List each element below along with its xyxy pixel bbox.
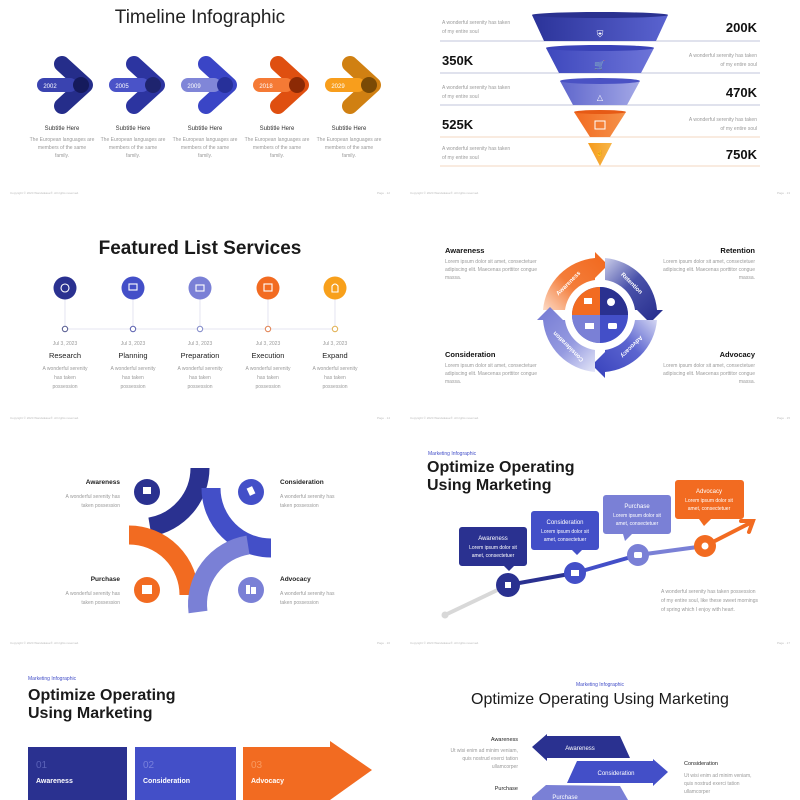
trend line [442,521,753,618]
funnel labels: of my entire soul [720,62,757,68]
text blocks: Awareness [491,737,518,743]
items text: possession [120,384,146,390]
callout boxes: Purchase [624,504,650,510]
text blocks: Lorem ipsum dolor sit amet, consectetuer [445,259,537,265]
items text: Jul 3, 2023 [121,341,145,347]
callout boxes: amet, consectetuer [688,506,731,512]
items text: A wonderful serenity [42,366,88,372]
arrow: 2009: 2009 [187,84,201,90]
items text: possession [255,384,281,390]
items text: possession [52,384,78,390]
heading: Using Marketing [427,477,551,494]
text blocks: Ut wisi enim ad minim veniam, [450,748,518,754]
items text: A wonderful serenity [245,366,291,372]
arrow: awareness [532,734,630,761]
descriptions: members of the same [38,145,86,151]
heading [427,451,575,494]
step 03 arrow: Advocacy [251,778,284,785]
text blocks: Lorem ipsum dolor sit amet, consectetuer [445,363,537,369]
subtitles: Subtitle Here [116,126,151,132]
arrow: 2029 [325,64,377,106]
subtitles [45,126,367,132]
items text: A wonderful serenity [177,366,223,372]
items text: A wonderful serenity [110,366,156,372]
step 01: Awareness [36,778,73,785]
divider lines [440,41,760,166]
text blocks: taken possession [81,600,120,606]
step 03 arrow: 03 [251,760,263,771]
text blocks: massa. [445,379,461,385]
funnel labels: of my entire soul [442,94,479,100]
text blocks: Consideration [684,761,718,767]
subtitles: Subtitle Here [188,126,223,132]
arcs [129,468,271,612]
subtitles: Subtitle Here [260,126,295,132]
descriptions: family. [342,153,356,159]
text blocks: taken possession [280,503,319,509]
descriptions: The European languages are [245,137,310,143]
step 03 arrow [243,741,372,800]
items text: Expand [322,351,348,360]
panel: step blocks [28,676,372,800]
heading [28,676,176,722]
description: of spring which I enjoy with heart. [661,607,735,613]
funnel layer 2 [546,45,654,73]
heading: Optimize Operating [427,459,575,476]
text blocks: A wonderful serenity has [66,591,120,597]
arrow: consideration: Consideration [597,771,635,777]
panel: growth line [410,451,790,645]
items text: has taken [122,375,144,381]
arrow: 2018: 2018 [259,84,273,90]
icon circles [54,276,346,300]
items text: has taken [189,375,211,381]
callout boxes: Lorem ipsum dolor sit [685,498,734,504]
items text: Research [49,351,81,360]
nodes [496,535,716,597]
funnel labels: A wonderful serenity has taken [442,85,510,91]
funnel layer 5: ☝ [596,149,604,157]
funnel layer 1: ⛨ [597,29,604,39]
descriptions: family. [55,153,69,159]
text blocks: Consideration [280,479,324,486]
panel: customer cycle [410,246,790,420]
items text: A wonderful serenity [312,366,358,372]
descriptions: family. [270,153,284,159]
arrow: consideration [567,759,668,786]
descriptions: The European languages are [173,137,238,143]
items text: Jul 3, 2023 [323,341,347,347]
text blocks: adipiscing elit. Maecenas porttitor congue [445,371,537,377]
funnel labels: of my entire soul [720,126,757,132]
panel: timeline infographic: Page · 12 [377,191,390,195]
funnel labels: 525K [442,117,474,132]
text blocks: Consideration [445,350,496,359]
panel: funnel: Page · 13 [777,191,790,195]
arrow: 2018 [253,64,305,106]
items text: possession [322,384,348,390]
heading: Optimize Operating [28,687,176,704]
text blocks [445,246,756,385]
panel: funnel [410,12,790,195]
callout boxes: Awareness [478,536,508,542]
funnel layer 1 [532,12,668,41]
descriptions: The European languages are [101,137,166,143]
panel: timeline infographic: Copyright © 2020 WandeEase®. All rights reserved. [10,191,79,195]
funnel labels: of my entire soul [442,29,479,35]
funnel layer 3: △ [597,93,604,102]
panel: timeline infographic [10,7,390,195]
items text: has taken [257,375,279,381]
panel: featured list services: Copyright © 2020 WandeEase®. All rights reserved. [10,416,79,420]
descriptions: members of the same [181,145,229,151]
descriptions: family. [198,153,212,159]
arrow: awareness: Awareness [565,746,595,752]
callout boxes: Consideration [546,520,584,526]
items text [42,341,358,390]
funnel layer 3 [560,78,640,105]
funnel labels: A wonderful serenity has taken [689,117,757,123]
text blocks: Purchase [91,576,120,583]
callout boxes: Advocacy [696,489,722,495]
step 02 [135,747,236,800]
items text: possession [187,384,213,390]
panel: funnel: Copyright © 2020 WandeEase®. All rights reserved. [410,191,479,195]
panel: star arcs [10,468,390,645]
funnel labels: 350K [442,53,474,68]
text blocks: massa. [739,275,755,281]
step 01 [28,747,127,800]
cycle diagram [537,252,663,378]
text blocks [450,737,752,795]
funnel labels: A wonderful serenity has taken [442,146,510,152]
title: Featured List Services [99,238,301,259]
heading: Marketing Infographic [428,451,477,457]
step 02: Consideration [143,778,190,785]
text blocks: Advocacy [720,350,756,359]
text blocks: Ut wisi enim ad minim veniam, [684,773,752,779]
callout boxes: Lorem ipsum dolor sit [541,529,590,535]
text blocks: A wonderful serenity has [280,591,335,597]
text blocks: A wonderful serenity has [280,494,335,500]
funnel layer 5 [588,143,612,166]
text blocks: quis nostrud exerci tation [684,781,740,787]
funnel layer 2: 🛒 [594,59,606,70]
text blocks: Awareness [445,246,484,255]
title: Timeline Infographic [115,7,285,28]
text blocks: taken possession [81,503,120,509]
descriptions: members of the same [253,145,301,151]
arrow: 2005: 2005 [115,84,129,90]
text blocks: taken possession [280,600,319,606]
text blocks: ullamcorper [684,789,710,795]
items text: has taken [54,375,76,381]
items text: has taken [324,375,346,381]
funnel labels: 200K [726,20,758,35]
callout boxes: Lorem ipsum dolor sit [469,545,518,551]
descriptions [30,137,382,159]
description: A wonderful serenity has taken possession [661,589,756,595]
text blocks: adipiscing elit. Maecenas porttitor congue [663,371,755,377]
arc: awareness: Awareness [556,270,583,297]
text blocks: A wonderful serenity has [66,494,120,500]
descriptions: The European languages are [30,137,95,143]
heading: Using Marketing [28,705,152,722]
step 01: 01 [36,760,48,771]
arrow: 2029: 2029 [331,84,345,90]
heading: Optimize Operating Using Marketing [471,691,729,708]
funnel labels: 470K [726,85,758,100]
panel: customer cycle: Page · 15 [777,416,790,420]
funnel layer 4 [574,110,626,137]
items text: Jul 3, 2023 [53,341,77,347]
arc: advocacy: Advocacy [619,334,643,359]
icon circles [134,479,264,603]
subtitles: Subtitle Here [45,126,80,132]
step 02: 02 [143,760,155,771]
text blocks: adipiscing elit. Maecenas porttitor congue [445,267,537,273]
descriptions: The European languages are [317,137,382,143]
description [661,589,758,613]
arc: retention: Retention [619,272,643,296]
text blocks: Lorem ipsum dolor sit amet, consectetuer [663,363,755,369]
text blocks: Lorem ipsum dolor sit amet, consectetuer [663,259,755,265]
text blocks: Advocacy [280,576,311,583]
panel: star arcs: Copyright © 2020 WandeEase®. All rights reserved. [10,641,79,645]
arrow: 2009 [181,64,233,106]
timeline nodes [62,326,338,332]
description: of my entire soul, like these sweet mornings [661,598,758,604]
descriptions: members of the same [109,145,157,151]
callout boxes: amet, consectetuer [472,553,515,559]
descriptions: family. [126,153,140,159]
panel: star arcs: Page · 16 [377,641,390,645]
callout boxes: Lorem ipsum dolor sit [613,513,662,519]
arrow: purchase [532,785,628,800]
panel: growth line: Page · 17 [777,641,790,645]
arrow: 2002: 2002 [43,84,57,90]
heading [471,682,729,708]
text blocks: Awareness [86,479,120,486]
callout boxes: amet, consectetuer [616,521,659,527]
funnel labels: A wonderful serenity has taken [442,20,510,26]
items text: Planning [118,351,148,360]
heading: Marketing Infographic [576,682,625,688]
items text: Execution [252,351,284,360]
items text: Jul 3, 2023 [256,341,280,347]
arc: consideration: Consideration [552,329,585,362]
arrow: 2005 [109,64,161,106]
text blocks: adipiscing elit. Maecenas porttitor congue [663,267,755,273]
funnel labels: 750K [726,147,758,162]
timeline axis [65,288,335,329]
panel: customer cycle: Copyright © 2020 WandeEase®. All rights reserved. [410,416,479,420]
subtitles: Subtitle Here [332,126,367,132]
funnel labels [442,20,758,162]
panel: featured list services [10,238,390,420]
descriptions: members of the same [325,145,373,151]
text blocks: Purchase [495,786,518,792]
callout boxes [459,480,744,571]
text blocks [66,479,335,606]
text blocks: ullamcorper [492,764,518,770]
panel: featured list services: Page · 14 [377,416,390,420]
funnel labels: A wonderful serenity has taken [689,53,757,59]
heading: Marketing Infographic [28,676,77,682]
text blocks: Retention [720,246,755,255]
text blocks: quis nostrud exerci tation [462,756,518,762]
text blocks: massa. [739,379,755,385]
items text: Preparation [181,351,219,360]
panel: swapping arrows [450,682,752,800]
funnel labels: of my entire soul [442,155,479,161]
arrow: 2002 [37,64,89,106]
text blocks: massa. [445,275,461,281]
panel: growth line: Copyright © 2020 WandeEase®. All rights reserved. [410,641,479,645]
callout boxes: amet, consectetuer [544,537,587,543]
items text: Jul 3, 2023 [188,341,212,347]
